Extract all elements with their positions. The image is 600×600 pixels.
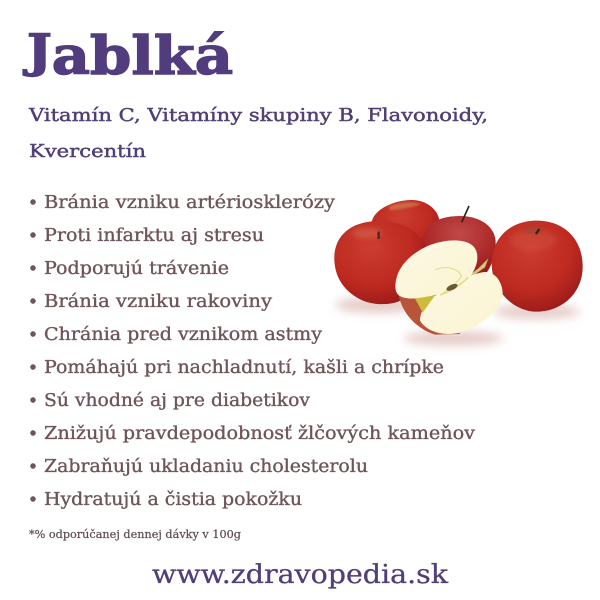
left apple bbox=[334, 221, 423, 304]
nutrients text block bbox=[28, 105, 488, 162]
benefits list: Bránia vzniku rakoviny bbox=[44, 292, 272, 312]
benefits list: Hydratujú a čistia pokožku bbox=[44, 490, 302, 510]
benefits list: Znižujú pravdepodobnosť žlčových kameňov bbox=[44, 424, 475, 444]
nutrients text block: Kvercentín bbox=[29, 141, 146, 162]
apple core bbox=[435, 268, 462, 295]
benefits list: Chránia pred vznikom astmy bbox=[44, 325, 322, 345]
stem bbox=[375, 232, 382, 239]
stem bbox=[462, 206, 469, 222]
nutrients text block: Vitamín C, Vitamíny skupiny B, Flavonoidy, bbox=[28, 105, 488, 126]
stem of halved apple bbox=[467, 258, 488, 277]
benefits list: Podporujú trávenie bbox=[44, 259, 229, 279]
right apple bbox=[492, 221, 583, 312]
benefits list: Proti infarktu aj stresu bbox=[44, 226, 264, 246]
lower half bbox=[420, 272, 503, 334]
cut apple halves bbox=[395, 240, 503, 335]
apples illustration bbox=[334, 200, 583, 346]
benefits list bbox=[30, 193, 475, 510]
title: J bbox=[22, 24, 52, 78]
middle apple bbox=[424, 206, 496, 277]
upper half bbox=[395, 240, 477, 299]
benefits list: Pomáhajú pri nachladnutí, kašli a chrípke bbox=[44, 358, 444, 378]
benefits list: Sú vhodné aj pre diabetikov bbox=[44, 391, 310, 411]
apple skin bbox=[399, 290, 460, 335]
stem bbox=[536, 229, 539, 234]
website url: www.zdravopedia.sk bbox=[152, 560, 448, 590]
benefits list: Bránia vzniku artériosklerózy bbox=[44, 193, 335, 213]
yellow core edge bbox=[415, 295, 435, 313]
shadow under apples bbox=[335, 297, 580, 346]
footnote: *% odporúčanej dennej dávky v 100g bbox=[29, 528, 241, 541]
back apple bbox=[372, 200, 439, 253]
benefits list: Zabraňujú ukladaniu cholesterolu bbox=[44, 457, 368, 477]
title: ablká bbox=[52, 26, 233, 87]
